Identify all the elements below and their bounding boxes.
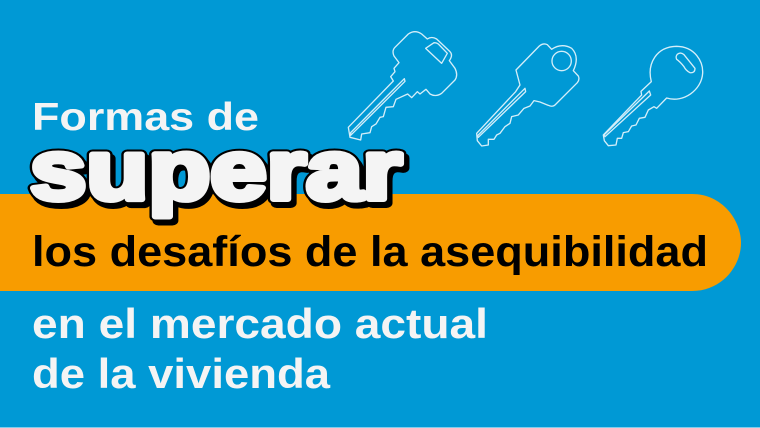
heading: superar: superar [30, 123, 402, 217]
orange band [0, 194, 741, 291]
text: de la vivienda: de la vivienda [32, 350, 331, 397]
text: en el mercado actual: en el mercado actual [32, 300, 488, 347]
heading: Formas de: Formas de [32, 96, 259, 139]
key icon: right key [603, 46, 703, 146]
key icon: middle key [477, 44, 579, 146]
key icon: left key [348, 32, 457, 140]
text: los desafíos de la asequibilidad: los desafíos de la asequibilidad [32, 228, 708, 276]
heading: superar: superar [30, 123, 402, 217]
heading: superar: superar [33, 127, 405, 221]
